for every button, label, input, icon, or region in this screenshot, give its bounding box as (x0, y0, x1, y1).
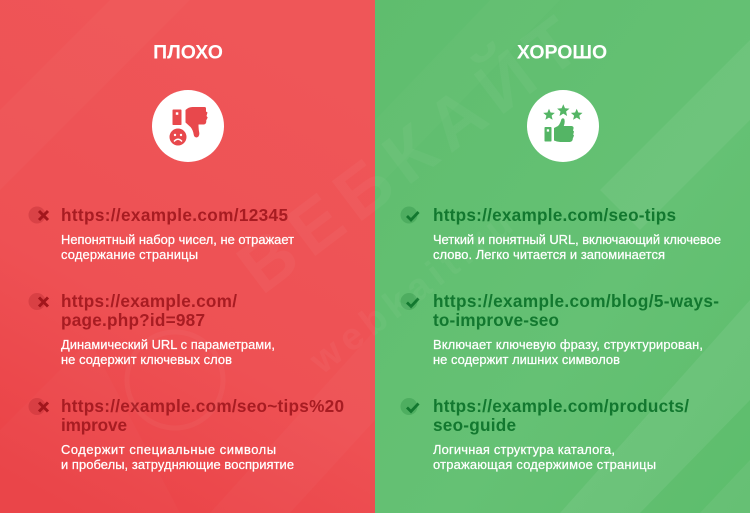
item: good URL 2: to-improve-seo (433, 310, 559, 330)
item: bad URL 2: https://example.com/ (61, 291, 237, 311)
icon: check 1 (400, 206, 418, 224)
item: good URL 2: Включает ключевую фразу, структурирован, (433, 337, 703, 352)
icon: thumbs up with stars (527, 90, 599, 162)
heading: bad: ПЛОХО (153, 42, 223, 64)
item: good URL 2: не содержит лишних символов (433, 352, 620, 367)
item: bad URL 3: https://example.com/seo~tips%20 (61, 396, 344, 416)
icon: thumbs down (152, 90, 224, 162)
item: good URL 3 (400, 396, 689, 472)
item: bad URL 3: и пробелы, затрудняющие восприятие (61, 457, 294, 472)
item: good URL 1 (400, 205, 721, 262)
heading: good: ХОРОШО (517, 42, 607, 64)
item: bad URL 3 (28, 396, 344, 472)
watermark (127, 0, 602, 428)
item: bad URL 3: Содержит специальные символы (61, 442, 276, 457)
icon: check 3 (400, 398, 418, 415)
item: good URL 3: seo-guide (433, 415, 516, 435)
item: bad URL 1: Непонятный набор чисел, не отражает (61, 232, 294, 247)
item: bad URL 1 (28, 205, 294, 262)
item: bad URL 2: page.php?id=987 (61, 310, 205, 330)
watermark: webkait.ru (301, 199, 525, 383)
item: bad URL 2 (28, 291, 275, 367)
panel: bad URLs (0, 0, 375, 513)
item: bad URL 3: improve (61, 415, 127, 435)
item: bad URL 1: https://example.com/12345 (61, 205, 288, 225)
item: good URL 3: https://example.com/products/ (433, 396, 689, 416)
item: bad URL 2: не содержит ключевых слов (61, 352, 232, 367)
item: good URL 1: слово. Легко читается и запоминается (433, 247, 665, 262)
icon: cross 2 (28, 293, 48, 310)
watermark: ВЕБКАЙТ (222, 0, 602, 309)
item: good URL 2 (400, 291, 719, 367)
item: good URL 1: https://example.com/seo-tips (433, 205, 676, 225)
item: good URL 3: отражающая содержимое страницы (433, 457, 656, 472)
item: good URL 1: Четкий и понятный URL, включающий ключевое (433, 232, 721, 247)
icon: cross 3 (28, 398, 48, 415)
icon: cross 1 (28, 206, 48, 224)
item: bad URL 2: Динамический URL с параметрами, (61, 337, 275, 352)
item: good URL 2: https://example.com/blog/5-ways- (433, 291, 719, 311)
item: good URL 3: Логичная структура каталога, (433, 442, 615, 457)
icon: check 2 (400, 293, 418, 310)
panel: good URLs (375, 0, 750, 513)
item: bad URL 1: содержание страницы (61, 247, 198, 262)
